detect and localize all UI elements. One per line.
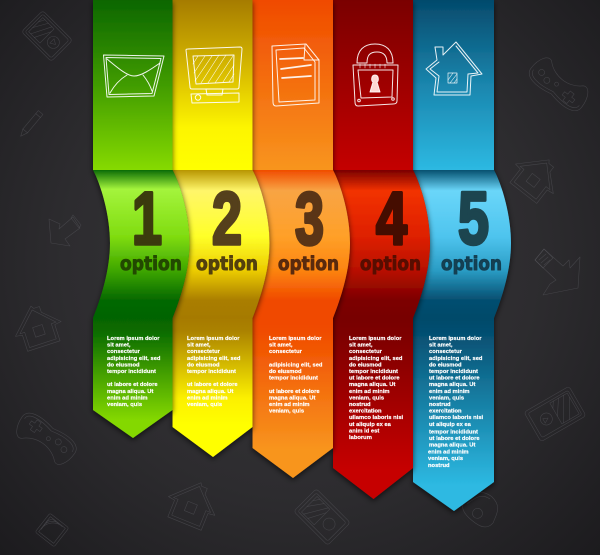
text block 2: tempor incididunt bbox=[187, 369, 236, 375]
background icon: tablet right bbox=[524, 386, 586, 442]
green top panel bbox=[93, 0, 172, 170]
text block 5: nostrud bbox=[428, 463, 450, 469]
text block 4: do eiusmod bbox=[349, 362, 382, 368]
red lower arrow panel bbox=[333, 318, 413, 499]
text block 3: consectetur bbox=[269, 349, 303, 355]
text block 3: Lorem ipsum dolor bbox=[269, 336, 322, 342]
text block 2: do eiusmod bbox=[187, 362, 220, 368]
text block 5: enim ad minim bbox=[428, 449, 469, 455]
column 4: red bbox=[333, 0, 430, 499]
text block 5: do eiusmod bbox=[429, 362, 462, 368]
text block 5: adipisicing elit, sed bbox=[429, 356, 483, 362]
text block 5: magna aliqua. Ut bbox=[429, 382, 475, 388]
background icon: gamepad left bbox=[11, 409, 80, 469]
text block 4: ut aliquip ex ea bbox=[349, 422, 392, 428]
text block 5: ut labore et dolore bbox=[429, 436, 480, 442]
icon: envelope bbox=[104, 55, 164, 97]
orange lower arrow panel bbox=[252, 318, 333, 478]
text block 1: do eiusmod bbox=[107, 362, 140, 368]
blue top panel bbox=[413, 0, 494, 170]
text block 3: ut labore et dolore bbox=[269, 389, 320, 395]
text block 1: Lorem ipsum dolor bbox=[107, 336, 160, 342]
text block 1: magna aliqua. Ut bbox=[107, 389, 153, 395]
background icon: small tablet bbox=[35, 513, 69, 547]
text block 2: Lorem ipsum dolor bbox=[187, 336, 240, 342]
number 5: 5 bbox=[458, 177, 489, 260]
text block 1: consectetur bbox=[107, 349, 141, 355]
icon: computer bbox=[186, 47, 242, 103]
text block 4: laborum bbox=[349, 435, 372, 441]
text block 4: exercitation bbox=[349, 409, 382, 415]
text block 2: magna aliqua. Ut bbox=[187, 389, 233, 395]
orange top panel bbox=[252, 0, 333, 170]
text block 2: veniam, quis bbox=[187, 402, 222, 408]
text block 4: tempor incididunt bbox=[349, 369, 398, 375]
column 1: green bbox=[93, 0, 190, 438]
orange curved band bbox=[252, 170, 350, 318]
text block 2: adipisicing elit, sed bbox=[187, 356, 241, 362]
green lower arrow panel bbox=[93, 318, 172, 438]
text block 5: tempor incididunt bbox=[429, 429, 478, 435]
number 4: 4 bbox=[376, 177, 407, 260]
background icon: house bottom bbox=[161, 473, 224, 533]
text block 5: ut aliquip ex ea bbox=[429, 422, 472, 428]
background icon: lock bottom right bbox=[458, 485, 505, 532]
column 5: blue bbox=[413, 0, 511, 511]
text block 2: ut labore et dolore bbox=[187, 382, 238, 388]
text block 4: sit amet, bbox=[349, 343, 373, 349]
background icon: house left bbox=[8, 299, 67, 353]
text block 2: enim ad minim bbox=[187, 395, 228, 401]
text block 5: Lorem ipsum dolor bbox=[429, 336, 482, 342]
text block 3: tempor incididunt bbox=[269, 376, 318, 382]
background icon: tablet top left bbox=[22, 11, 72, 61]
option label 3: option bbox=[278, 254, 339, 275]
text block 4: nostrud bbox=[349, 402, 371, 408]
option label 4: option bbox=[360, 254, 421, 275]
background icon: tablet bottom bbox=[294, 489, 350, 545]
text block 4: consectetur bbox=[349, 349, 383, 355]
text block 5: tempor incididunt bbox=[429, 369, 478, 375]
icon: padlock bbox=[353, 44, 398, 106]
icon: document bbox=[272, 44, 319, 106]
text block 5: ut labore et dolore bbox=[429, 376, 480, 382]
number 2: 2 bbox=[212, 177, 242, 260]
text block 3: sit amet, bbox=[269, 343, 293, 349]
text block 5: nostrud bbox=[429, 402, 451, 408]
text block 3: magna aliqua. Ut bbox=[269, 395, 315, 401]
text block 5: veniam, quis bbox=[428, 456, 463, 462]
text block 4: ullamco laboris nisi bbox=[349, 415, 404, 421]
icon: house bbox=[426, 42, 482, 95]
background icon: house right bbox=[504, 145, 568, 208]
text block 2: sit amet, bbox=[187, 343, 211, 349]
red top panel bbox=[333, 0, 413, 170]
text block 5: exercitation bbox=[429, 409, 462, 415]
column 2: yellow bbox=[172, 0, 270, 457]
text block 5: ullamco laboris nisi bbox=[429, 415, 484, 421]
option label 5: option bbox=[441, 254, 502, 275]
text block 2: consectetur bbox=[187, 349, 221, 355]
yellow top panel bbox=[172, 0, 252, 170]
background icon: arrow right bbox=[535, 249, 580, 295]
text block 4: enim ad minim bbox=[349, 389, 390, 395]
background icon: arrow left bbox=[49, 215, 81, 246]
background icon: gamepad right bbox=[525, 53, 593, 115]
text block 3: adipisicing elit, sed bbox=[269, 362, 323, 368]
blue lower arrow panel bbox=[413, 318, 494, 511]
number 3: 3 bbox=[295, 177, 324, 260]
text block 5: magna aliqua. Ut bbox=[429, 443, 475, 449]
blue curved band bbox=[413, 170, 511, 318]
text block 4: magna aliqua. Ut bbox=[349, 382, 395, 388]
text block 4: anim id est bbox=[349, 428, 379, 434]
text block 3: enim ad minim bbox=[269, 402, 310, 408]
text block 5: sit amet, bbox=[429, 343, 453, 349]
text block 4: veniam, quis bbox=[349, 395, 384, 401]
text block 3: do eiusmod bbox=[269, 369, 302, 375]
text block 5: consectetur bbox=[429, 349, 463, 355]
column 3: orange bbox=[252, 0, 350, 478]
text block 1: tempor incididunt bbox=[107, 369, 156, 375]
text block 1: adipisicing elit, sed bbox=[107, 356, 161, 362]
number 1: 1 bbox=[132, 177, 162, 260]
yellow curved band bbox=[172, 170, 270, 318]
text block 3: veniam, quis bbox=[269, 409, 304, 415]
option label 2: option bbox=[196, 254, 258, 275]
yellow lower arrow panel bbox=[172, 318, 252, 457]
text block 4: Lorem ipsum dolor bbox=[349, 336, 402, 342]
text block 5: veniam, quis bbox=[429, 395, 464, 401]
text block 1: sit amet, bbox=[107, 343, 131, 349]
green curved band bbox=[93, 170, 190, 318]
background icon: pencil bbox=[18, 111, 43, 138]
option label 1: option bbox=[120, 254, 182, 275]
text block 5: enim ad minim bbox=[429, 389, 470, 395]
red curved band bbox=[333, 170, 430, 318]
text block 1: ut labore et dolore bbox=[107, 382, 158, 388]
text block 1: veniam, quis bbox=[107, 402, 142, 408]
text block 1: enim ad minim bbox=[107, 395, 148, 401]
text block 4: adipisicing elit, sed bbox=[349, 356, 403, 362]
text block 4: ut labore et dolore bbox=[349, 376, 400, 382]
